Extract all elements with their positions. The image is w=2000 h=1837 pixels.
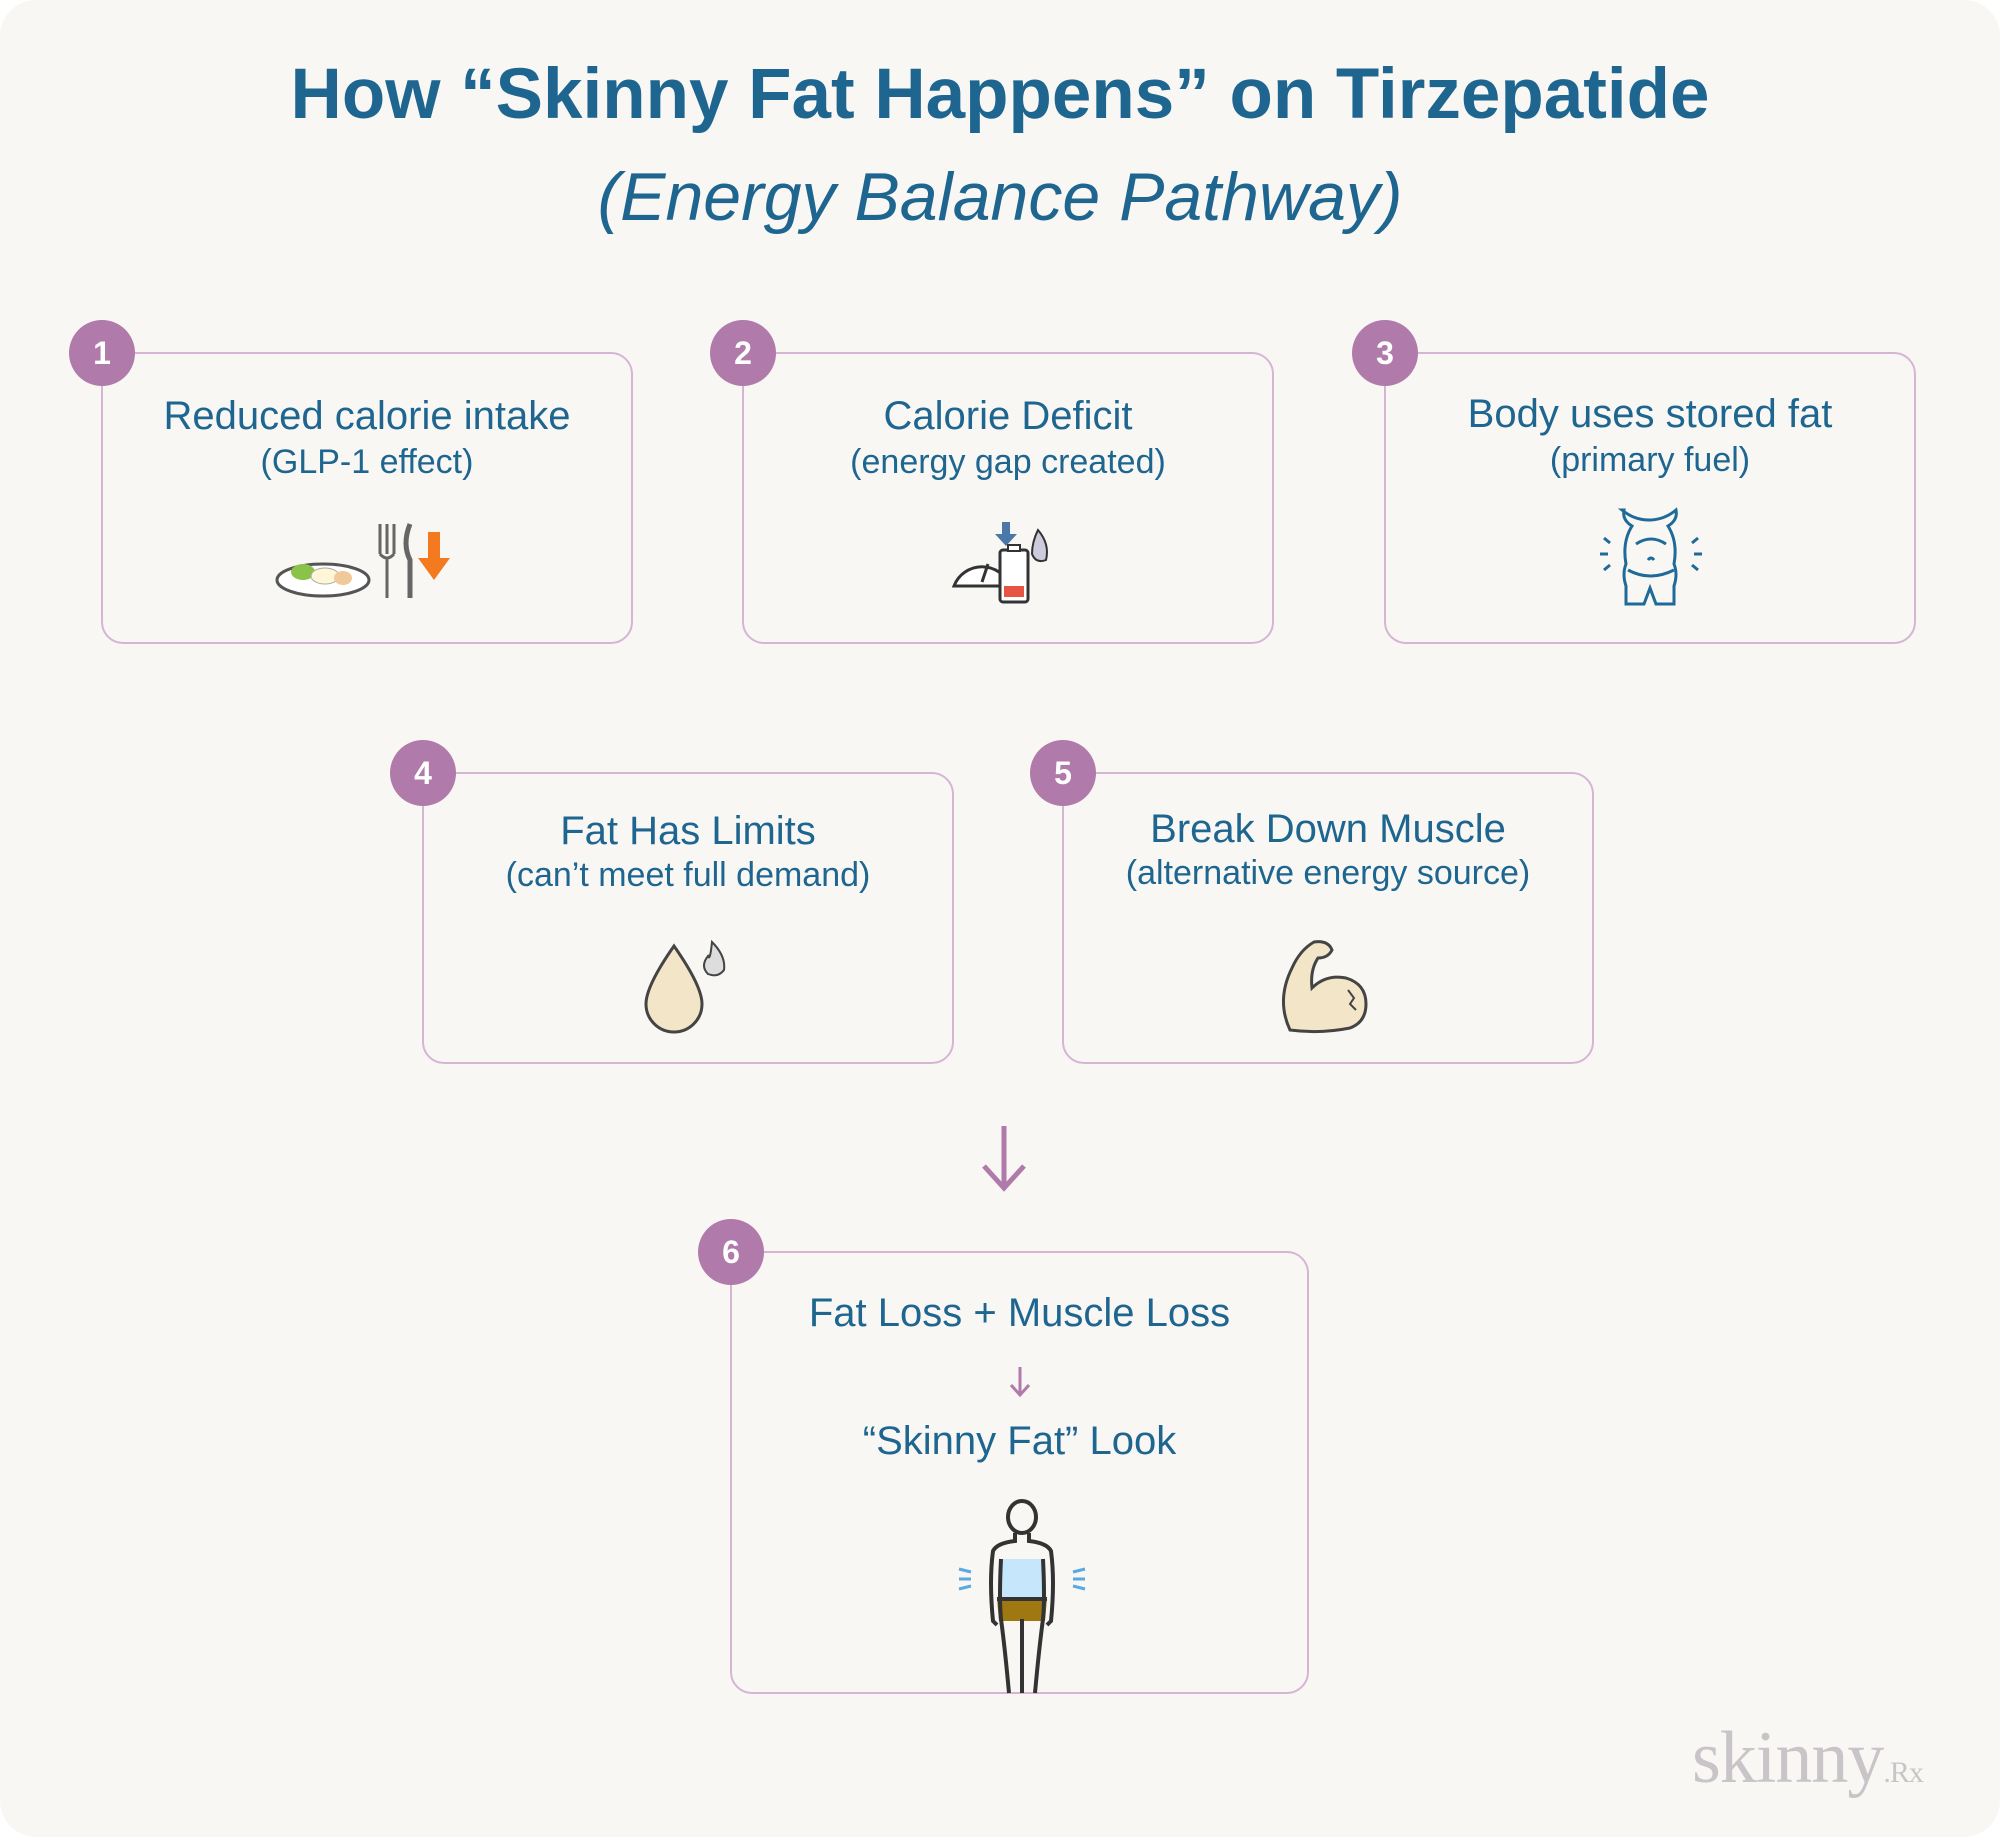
badge 1: 1 (93, 335, 111, 371)
logo: skinny.Rx (1692, 1717, 1923, 1799)
heading 6: Fat Loss + Muscle Loss (809, 1291, 1230, 1335)
panel: step 2 (742, 352, 1274, 644)
panel: step 4 (422, 772, 954, 1064)
icon: fat drop (644, 940, 726, 1034)
badge 6 (698, 1219, 764, 1285)
badge 4 (390, 740, 456, 806)
panel: step 5 (1062, 772, 1594, 1064)
subtext 4: (can’t meet full demand) (506, 856, 870, 894)
heading 3: Body uses stored fat (1468, 392, 1832, 436)
heading 1: Reduced calorie intake (164, 394, 570, 438)
badge 3: 3 (1376, 335, 1394, 371)
title: How “Skinny Fat Happens” on Tirzepatide (291, 55, 1709, 134)
badge 3 (1352, 320, 1418, 386)
badge 2: 2 (734, 335, 752, 371)
panel: step 6 (730, 1251, 1309, 1694)
badge 2 (710, 320, 776, 386)
subtext 2: (energy gap created) (850, 443, 1166, 481)
icon: skinny fat figure (958, 1499, 1086, 1694)
icon: gauge battery (952, 522, 1048, 604)
badge 5: 5 (1054, 755, 1072, 791)
subtext 3: (primary fuel) (1550, 441, 1750, 479)
badge 6: 6 (722, 1234, 740, 1270)
panel: step 3 (1384, 352, 1916, 644)
icon: plate fork knife arrow (276, 523, 450, 598)
arrow: down (982, 1126, 1026, 1192)
badge 1 (69, 320, 135, 386)
small arrow (1010, 1367, 1030, 1398)
result text: “Skinny Fat” Look (863, 1419, 1176, 1463)
badge 5 (1030, 740, 1096, 806)
subtitle: (Energy Balance Pathway) (597, 159, 1403, 235)
heading 5: Break Down Muscle (1150, 807, 1506, 851)
icon: belly (1600, 507, 1702, 606)
subtext 1: (GLP-1 effect) (261, 443, 473, 481)
heading 2: Calorie Deficit (884, 394, 1132, 438)
badge 4: 4 (414, 755, 432, 791)
panel: step 1 (101, 352, 633, 644)
subtext 5: (alternative energy source) (1126, 854, 1530, 892)
icon: flexed arm (1282, 940, 1368, 1034)
heading 4: Fat Has Limits (560, 809, 816, 853)
